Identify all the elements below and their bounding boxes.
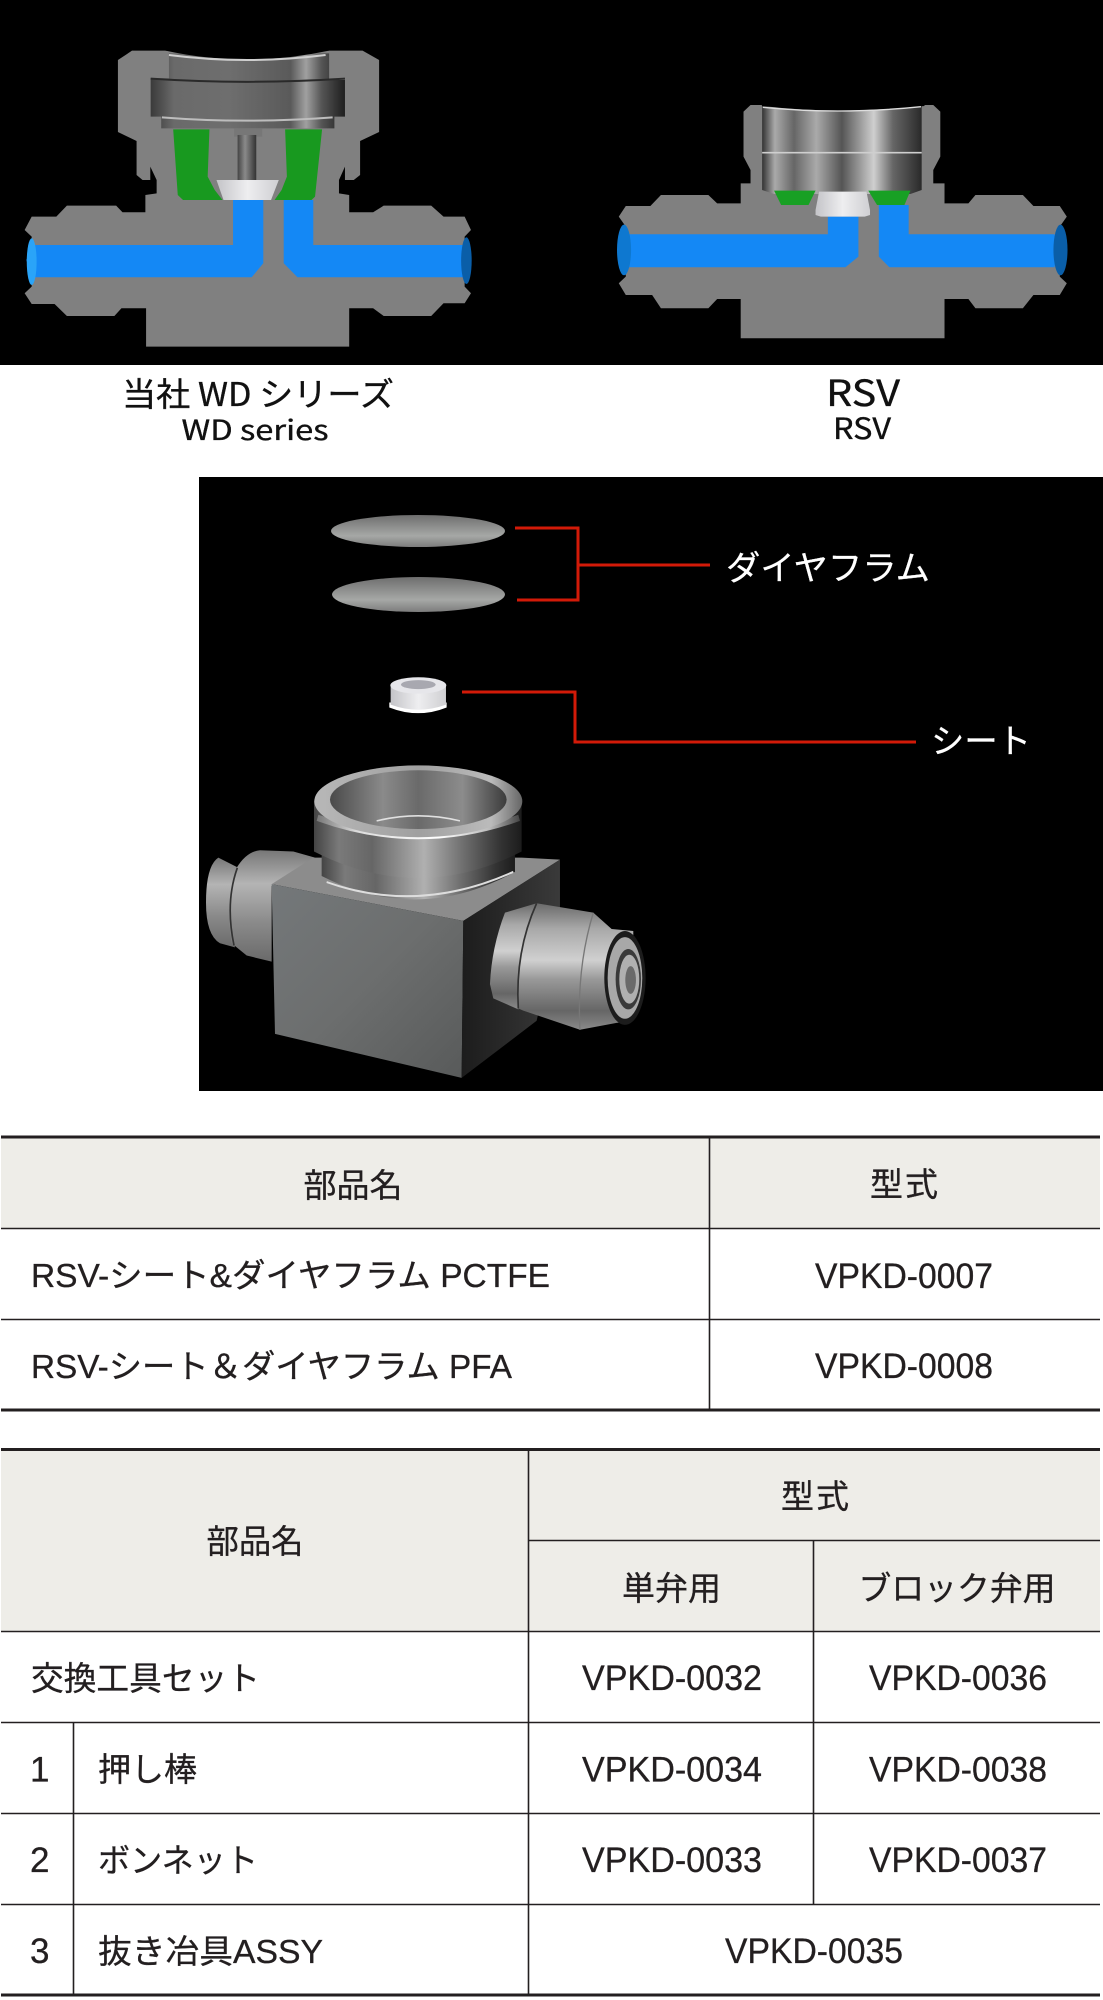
header: part name: 部品名 — [304, 1167, 402, 1204]
right fitting — [490, 903, 646, 1030]
diaphragm discs — [331, 515, 505, 612]
row: PFA — [31, 1347, 993, 1386]
table: seat and diaphragm parts — [1, 1136, 1100, 1412]
callout: diaphragm leader line — [515, 528, 710, 600]
row: bonnet — [30, 1841, 1047, 1880]
row: push rod: VPKD-0038 — [869, 1750, 1047, 1790]
row: PCTFE: RSV-シート&ダイヤフラム PCTFE — [31, 1257, 550, 1294]
threaded collar — [314, 765, 522, 899]
blue fluid channels — [26, 200, 472, 285]
row: PFA: VPKD-0008 — [815, 1347, 993, 1386]
caption: RSV: RSV — [826, 365, 900, 417]
caption: RSV: RSV — [833, 406, 891, 448]
header: part name: 部品名 — [206, 1523, 304, 1560]
row: extraction jig: VPKD-0035 — [725, 1932, 903, 1971]
label: seat: シート — [931, 723, 1031, 761]
block side face — [462, 860, 560, 1078]
row: tool set — [31, 1659, 1047, 1698]
bonnet cavity — [151, 47, 345, 128]
panel: exploded view — [199, 477, 1103, 1091]
valve stem — [234, 128, 262, 182]
row: PCTFE: VPKD-0007 — [815, 1257, 993, 1296]
caption: RSV — [826, 365, 900, 448]
green diaphragm area — [774, 191, 816, 205]
header: model: 型式 — [870, 1166, 938, 1203]
row: push rod: VPKD-0034 — [582, 1750, 762, 1790]
valve body 3D — [206, 765, 646, 1078]
valve body cross-section — [619, 105, 1067, 338]
header: block valve: ブロック弁用 — [858, 1570, 1056, 1607]
row: push rod: 1 — [30, 1750, 49, 1790]
white seat ring — [389, 677, 447, 713]
left fitting — [206, 850, 315, 962]
valve body cross-section — [25, 51, 471, 347]
row: bonnet: VPKD-0033 — [582, 1841, 762, 1880]
row: bonnet: VPKD-0037 — [869, 1841, 1047, 1880]
row: tool set: 交換工具セット — [31, 1660, 260, 1697]
block front face — [272, 884, 463, 1078]
white valve seat — [216, 180, 279, 200]
row: extraction jig: 抜き冶具ASSY — [98, 1933, 323, 1970]
row: bonnet: ボンネット — [98, 1842, 258, 1879]
row: extraction jig — [30, 1932, 903, 1971]
header: single valve: 単弁用 — [622, 1570, 721, 1607]
caption: WD series: WD series — [182, 409, 328, 449]
caption: WD series — [122, 368, 394, 449]
callout: seat leader line — [462, 692, 916, 742]
panel: valve cross-section comparison — [0, 0, 1103, 365]
row: extraction jig: 3 — [30, 1932, 49, 1971]
header: model: 型式 — [781, 1478, 849, 1515]
diagram: RSV cross-section — [617, 100, 1068, 338]
row: PFA: RSV-シート＆ダイヤフラム PFA — [31, 1348, 512, 1385]
blue fluid channels — [617, 205, 1068, 275]
row: push rod: 押し棒 — [98, 1751, 197, 1788]
caption: WD series: 当社 WD シリーズ — [122, 368, 394, 416]
diagram: WD series cross-section — [25, 47, 472, 347]
notch shadows — [150, 167, 345, 180]
row: push rod — [30, 1750, 1047, 1790]
row: bonnet: 2 — [30, 1841, 49, 1880]
row: PCTFE — [31, 1257, 993, 1296]
table: replacement tools — [1, 1448, 1100, 1996]
metallic bore — [759, 100, 924, 194]
white valve seat — [816, 192, 870, 217]
block top face — [272, 858, 560, 921]
row: tool set: VPKD-0036 — [869, 1659, 1047, 1698]
row: tool set: VPKD-0032 — [582, 1659, 762, 1698]
label: diaphragm: ダイヤフラム — [726, 550, 930, 588]
green diaphragm chamber — [173, 129, 222, 200]
